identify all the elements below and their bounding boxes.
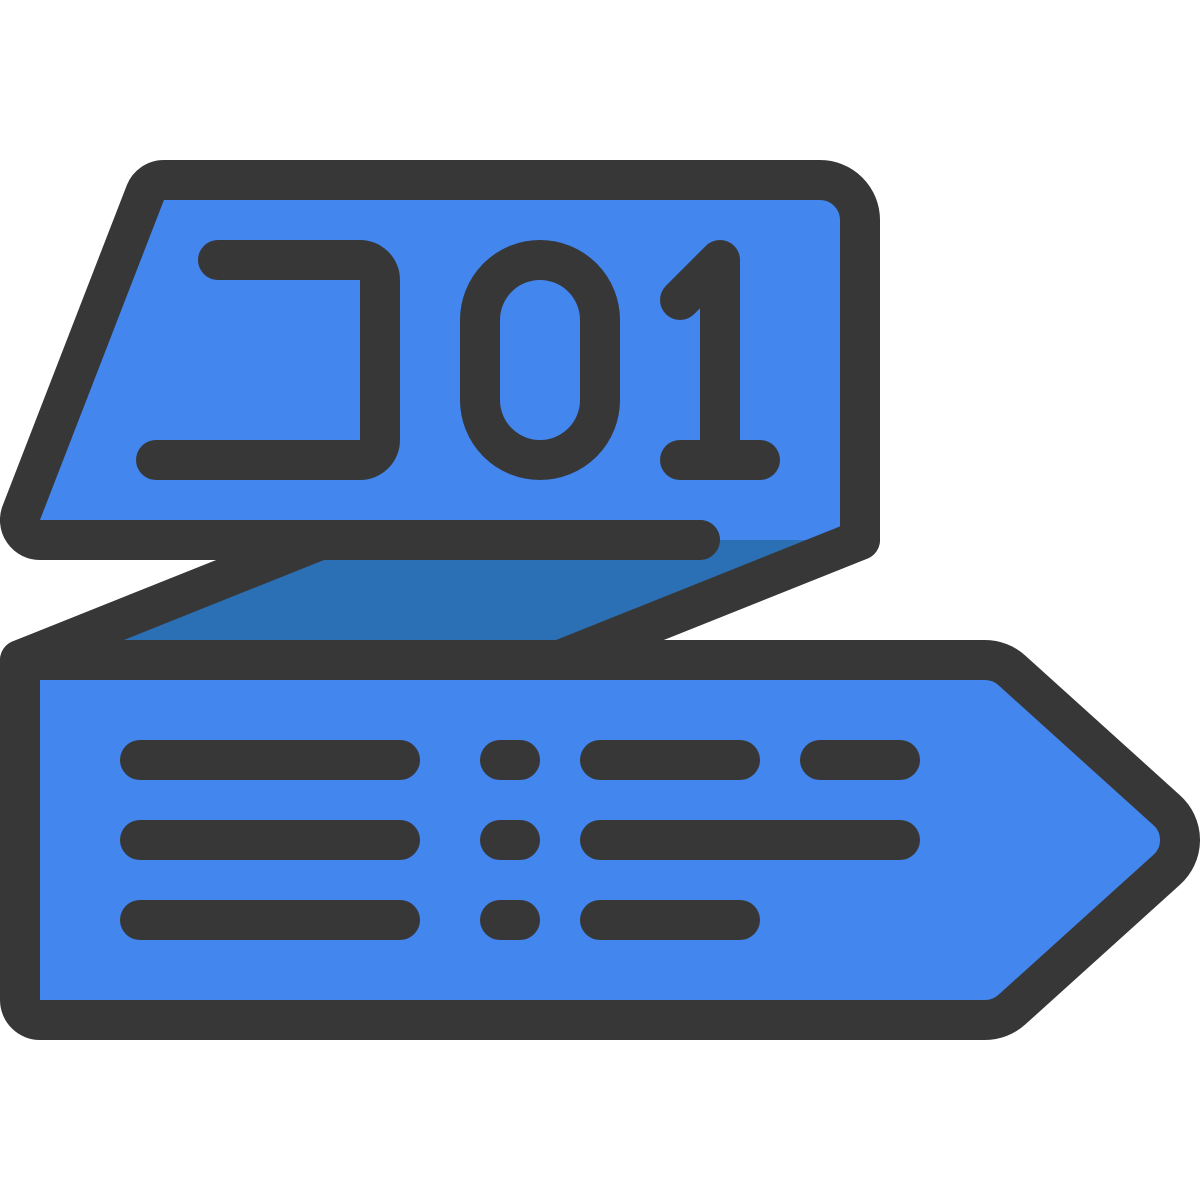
icon: digit one [680,260,760,460]
text lines: first row [140,740,900,780]
text lines: third row [140,900,740,940]
icon: digit zero [480,260,600,460]
panel: upper flap [20,180,860,540]
icon: digit-like bracket [156,260,380,460]
panel: arrow tag [20,660,1180,1020]
text lines: second row [140,820,900,860]
panel: folded shadow strip [20,540,860,660]
